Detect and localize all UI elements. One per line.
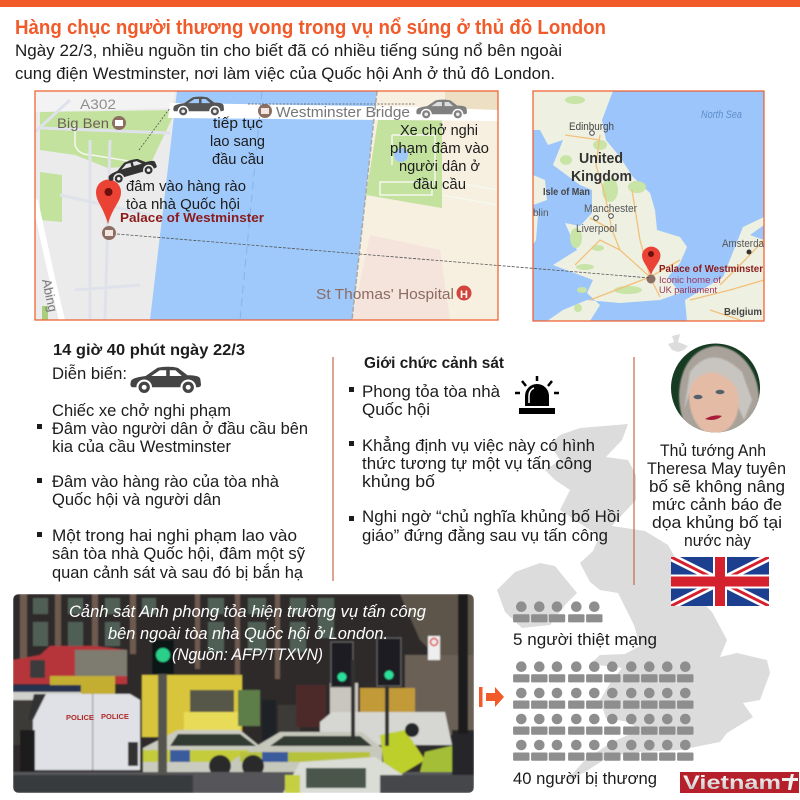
map label: Palace of Westminster overview: Palace of Westminster	[659, 264, 763, 275]
bullet item 3	[349, 507, 620, 545]
map label: Amsterdam: Amsterda	[722, 238, 765, 250]
map label: Palace of Westminster overview: UK parliament	[659, 285, 717, 296]
column dividers	[333, 357, 634, 585]
intro text: Ngày 22/3, nhiều nguồn tin cho biết đã có nhiều tiếng súng nổ bên ngoài	[15, 41, 562, 60]
map label: Manchester and Liverpool: Liverpool	[576, 223, 617, 235]
map label: St Thomas' Hospital: St Thomas' Hospital	[316, 286, 454, 303]
callout: suspect car hit people: Xe chở nghi	[400, 122, 478, 139]
arrow	[479, 687, 504, 707]
photo caption	[69, 602, 427, 664]
text: Theresa May statement: dọa khủng bố tại	[652, 513, 782, 532]
UK silhouette background	[497, 334, 770, 782]
map label: United Kingdom: Kingdom	[571, 168, 632, 185]
text: Theresa May statement: nước này	[684, 531, 751, 550]
intro text	[15, 41, 562, 83]
icon: police siren	[515, 376, 559, 414]
map label: Belgium: Belgium	[724, 307, 762, 318]
title: Hàng chục người thương vong trong vụ nổ súng ở thủ đô London	[15, 17, 606, 39]
map label: A302: A302	[80, 96, 116, 112]
callout: continued to bridge	[210, 115, 265, 168]
map label: Isle of Man: Isle of Man	[543, 187, 590, 198]
label: 5 dead: 5 người thiệt mạng	[513, 630, 657, 649]
photo: police cordon: POLICE	[101, 712, 129, 721]
text: Theresa May statement: bố sẽ không nâng	[649, 477, 785, 496]
icon: car on bridge right	[416, 100, 467, 118]
bullet item 1: Đâm vào người dân ở đầu cầu bên	[52, 419, 308, 438]
bullet item 3: quan cảnh sát và sau đó bị bắn hạ	[52, 563, 304, 582]
logo: Vietnam+: Vietnam	[683, 773, 781, 794]
photo caption: bên ngoài tòa nhà Quốc hội ở London.	[108, 624, 388, 643]
map label: North Sea: North Sea	[701, 109, 742, 121]
bullet item 2	[37, 472, 280, 509]
portrait: Theresa May	[670, 342, 762, 434]
map label: St Thomas' Hospital: H	[460, 289, 468, 301]
text: Theresa May statement	[647, 441, 786, 550]
callout: Palace of Westminster: Palace of Westminster	[120, 210, 264, 225]
map label: Westminster Bridge: Westminster Bridge	[276, 104, 410, 121]
bullet item 1: Quốc hội	[362, 400, 430, 419]
bullet item 2	[349, 436, 595, 491]
map label: Palace of Westminster overview	[659, 264, 763, 296]
bullet item 3: Một trong hai nghi phạm lao vào	[52, 526, 297, 545]
map label: United Kingdom: United	[579, 150, 623, 167]
heading: police: Giới chức cảnh sát	[364, 355, 505, 372]
bullet item 1: Phong tỏa tòa nhà	[362, 382, 501, 401]
callout: continued to bridge: tiếp tục	[213, 115, 264, 132]
photo caption: Cảnh sát Anh phong tỏa hiện trường vụ tấn công	[69, 602, 427, 621]
photo: police cordon: POLICE	[66, 713, 94, 722]
bullet item 1: kia của cầu Westminster	[52, 437, 231, 456]
map label: United Kingdom	[571, 150, 632, 185]
bullet item 1	[349, 382, 501, 419]
callout: hit fence: đâm vào hàng rào	[126, 178, 246, 195]
callout: continued to bridge: lao sang	[210, 133, 265, 150]
text: Theresa May statement: mức cảnh báo đe	[652, 495, 782, 514]
photo: police cordon	[13, 594, 474, 793]
map label: Amsterdam	[722, 238, 765, 254]
panel: timeline column	[37, 342, 308, 582]
map callouts	[96, 97, 489, 240]
bullet item 2: Khẳng định vụ việc này có hình	[362, 436, 595, 455]
map label: Edinburgh: Edinburgh	[569, 121, 614, 133]
callout: suspect car hit people: đầu cầu	[413, 176, 466, 193]
callout: hit fence: tòa nhà Quốc hội	[126, 196, 240, 213]
bullet item 3: sân tòa nhà Quốc hội, đâm một sỹ	[52, 544, 305, 563]
panel: street map of Westminster	[35, 91, 498, 320]
text: Theresa May statement: Thủ tướng Anh	[660, 441, 766, 460]
map label: dublin fragment: blin	[533, 208, 549, 219]
bullet item 2: khủng bố	[362, 472, 436, 491]
callout: suspect car hit people: người dân ở	[399, 158, 480, 175]
label: 40 injured: 40 người bị thương	[513, 769, 657, 788]
bullet item 3	[37, 526, 305, 582]
text: suspect car: Chiếc xe chở nghi phạm	[52, 401, 231, 420]
text: Theresa May statement: Theresa May tuyên	[647, 459, 786, 478]
icon: car tilted	[105, 154, 158, 185]
map label: Manchester and Liverpool	[576, 203, 637, 235]
intro text: cung điện Westminster, nơi làm việc của Quốc hội Anh ở thủ đô London.	[15, 64, 555, 83]
callout: suspect car hit people: phạm đâm vào	[390, 140, 489, 157]
heading: time: 14 giờ 40 phút ngày 22/3	[53, 342, 245, 359]
dashed route lines	[139, 104, 416, 150]
map label: Abingdon street: Abing	[39, 278, 61, 313]
bullet item 3: giáo” đứng đằng sau vụ tấn công	[362, 526, 608, 545]
icon: map pin	[96, 180, 121, 240]
icon: car on bridge centre	[173, 97, 224, 115]
icon: car	[130, 367, 201, 393]
map label: Manchester and Liverpool: Manchester	[584, 203, 637, 215]
bullet item 3: Nghi ngờ “chủ nghĩa khủng bố Hồi	[362, 507, 620, 526]
panel: police column	[349, 355, 620, 545]
label: developments: Diễn biến:	[52, 364, 127, 383]
logo: Vietnam+	[680, 772, 799, 794]
map pin overview	[642, 247, 660, 284]
callout: hit fence	[126, 178, 246, 213]
bullet item 2: Đâm vào hàng rào của tòa nhà	[52, 472, 280, 491]
panel: UK overview map	[533, 91, 765, 321]
icon: UK flag	[671, 557, 769, 606]
map label: Palace of Westminster overview: Iconic home of	[659, 275, 721, 286]
bullet item 1	[37, 419, 308, 456]
callout: continued to bridge: đầu cầu	[212, 151, 264, 168]
photo caption: (Nguồn: AFP/TTXVN)	[172, 645, 323, 664]
map label: Big Ben: Big Ben	[57, 115, 109, 131]
dashed connector between maps	[117, 234, 650, 278]
bullet item 2: thức tương tự một vụ tấn công	[362, 454, 592, 473]
icons: 40 injured	[513, 661, 694, 761]
bullet item 2: Quốc hội và người dân	[52, 490, 221, 509]
icons: 5 dead	[513, 601, 602, 622]
callout: suspect car hit people	[390, 122, 489, 193]
top orange bar	[0, 0, 800, 7]
